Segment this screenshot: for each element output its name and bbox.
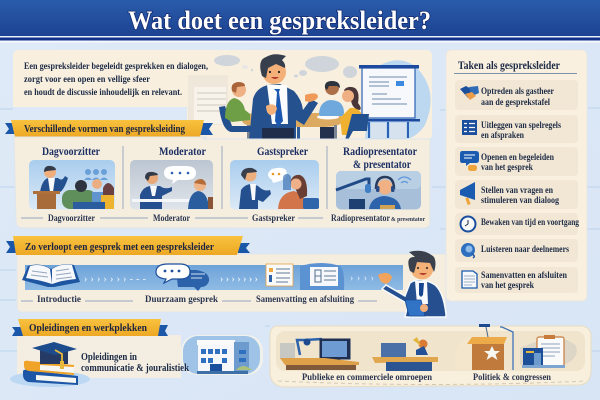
banner: verschillende vormen: Verschillende vormen van gespreksleiding — [24, 124, 186, 135]
column: Radiopresentator: Radiopresentator — [331, 213, 391, 224]
task: stellen van vragen: Stellen van vragen en — [481, 185, 554, 196]
header banner — [0, 0, 600, 42]
panel: opleidingen — [10, 335, 263, 387]
illustration: main speaker — [249, 54, 318, 140]
panel: gespreksverloop: Duurzaam gesprek — [145, 294, 219, 305]
illustration: presenter with folder — [378, 251, 446, 317]
task: openen en begeleiden: Openen en begeleiden — [481, 152, 555, 163]
task: uitleggen van spelregels — [455, 115, 578, 143]
column: Moderator: Moderator — [153, 213, 191, 224]
illustration: seated woman — [340, 87, 369, 140]
panel: opleidingen: Opleidingen in — [81, 352, 137, 363]
column: Moderator — [130, 146, 213, 224]
column: Dagvoorzitter: Dagvoorzitter — [48, 213, 96, 224]
intro text: zorgt voor een open en vellige sfeer — [24, 74, 151, 85]
icon: open book — [22, 264, 80, 287]
illustration: whiteboard — [359, 60, 431, 140]
process band — [25, 265, 403, 290]
intro text: en houdt de discussie inhoudelijk en relevant. — [24, 87, 182, 98]
task: openen en begeleiden — [455, 147, 578, 176]
banner: verschillende vormen — [5, 120, 213, 137]
task: luisteren naar deelnemers: Luisteren naar deelnemers — [481, 244, 569, 255]
icon: speech bubbles — [460, 151, 479, 171]
icon: listening ear — [461, 243, 475, 258]
illustration: seated boy — [219, 82, 252, 132]
icon: megaphone — [460, 182, 475, 205]
banner: gespreksverloop — [6, 236, 250, 255]
task: bewaken van tijd — [455, 213, 579, 235]
arrows: chevrons: ›››› — [350, 273, 374, 284]
icon: document — [462, 271, 477, 288]
task: uitleggen van spelregels: en afspraken — [481, 130, 525, 141]
illustration: broadcast desk — [280, 338, 359, 370]
column: Radiopresentator: & presentator — [353, 159, 411, 171]
task: optreden als gastheer: Optreden als gastheer — [481, 86, 555, 97]
intro text: Een gespreksleider begeleidt gesprekken en dialogen, — [24, 61, 209, 72]
column: Dagvoorzitter — [29, 146, 115, 224]
task: samenvatten en afsluiten — [455, 267, 578, 293]
icon: speech bubbles — [156, 264, 209, 291]
column: Dagvoorzitter: Dagvoorzitter — [42, 146, 100, 158]
title: Wat doet een gespreksleider? — [128, 6, 431, 35]
task: openen en begeleiden: van het gesprek — [481, 162, 534, 173]
illustration: seated man — [319, 81, 344, 140]
column: Gastspreker: Gastspreker — [252, 213, 296, 224]
panel: werkplekken — [270, 324, 591, 387]
column: Radiopresentator: Radiopresentator — [343, 146, 417, 158]
column: Gastspreker: Gastspreker — [257, 146, 308, 158]
panel: taken als gespreksleider — [446, 50, 587, 301]
task: stellen van vragen — [455, 180, 578, 209]
task: optreden als gastheer: aan de gesprekstafel — [481, 97, 550, 108]
panel: werkplekken: Politiek & congressen — [473, 372, 552, 383]
panel: gespreksverloop — [17, 254, 446, 312]
task: samenvatten en afsluiten: Samenvatten en afsluiten — [481, 270, 568, 281]
card illustration: chairperson at lectern — [29, 160, 115, 210]
task: optreden als gastheer — [455, 80, 578, 110]
card illustration: radio presenter — [336, 171, 421, 210]
icon: checklist — [462, 120, 477, 135]
icon: highlighted closing card — [300, 263, 344, 290]
panel: vormen van gespreksleiding — [14, 137, 430, 228]
icon: clock — [460, 216, 476, 232]
arrows: chevrons: ›››››››‑‑‑ — [84, 274, 146, 285]
illustration: briefcase and clipboard — [520, 335, 577, 368]
column: Radiopresentator: & presentator — [391, 216, 425, 223]
task: uitleggen van spelregels: Uitleggen van spelregels — [481, 120, 561, 131]
column: Gastspreker — [230, 146, 319, 224]
task: stellen van vragen: stimuleren van dialoog — [481, 195, 559, 206]
illustration: paper stack — [188, 75, 228, 125]
task: samenvatten en afsluiten: van het gesprek — [481, 280, 535, 291]
panel: werkplekken: Publieke en commerciele omroepen — [302, 372, 433, 383]
illustration: building — [183, 336, 260, 374]
illustration: podium with star — [455, 324, 513, 370]
task: luisteren naar deelnemers — [455, 239, 578, 262]
icon: summary document — [266, 264, 293, 286]
card illustration: moderator with guest — [130, 160, 213, 210]
panel: intro with meeting illustration — [13, 50, 432, 140]
illustration: studio desk — [372, 337, 438, 371]
illustration: table — [242, 112, 343, 140]
arrows: chevrons: ››››››› — [220, 274, 258, 285]
banner: opleidingen — [12, 319, 168, 336]
panel: gespreksverloop: Samenvatting en afsluiting — [256, 294, 354, 305]
banner: gespreksverloop: Zo verloopt een gesprek met een gespreksleider — [25, 242, 214, 253]
icon: handshake — [460, 86, 479, 100]
panel: taken als gespreksleider: Taken als gespreksleider — [458, 60, 560, 72]
panel: opleidingen: communicatie & jouralistiek — [81, 363, 189, 374]
column: Moderator: Moderator — [159, 146, 206, 158]
illustration: thought clouds — [214, 55, 357, 78]
panel: gespreksverloop: Introductie — [37, 294, 82, 305]
illustration: books and graduation cap — [10, 342, 90, 387]
card illustration: guest speaker — [230, 160, 319, 210]
banner: opleidingen: Opleidingen en werkplekken — [29, 323, 147, 334]
intro text — [24, 61, 209, 98]
column: Radiopresentator — [331, 146, 425, 224]
